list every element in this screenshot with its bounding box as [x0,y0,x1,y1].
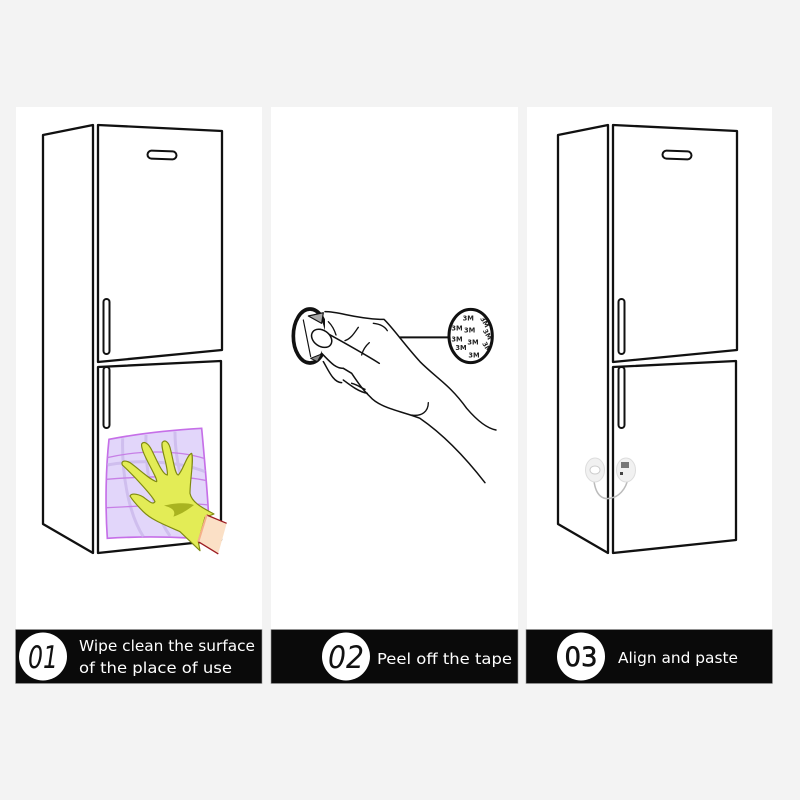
caption text: Align and paste [618,649,738,667]
step number 03 [557,632,605,680]
tape backing print: 3M [480,340,493,354]
caption bar: step 3 [526,630,772,684]
illustration: refrigerator, step 1 [43,125,222,553]
caption text [79,637,255,677]
tape backing print: 3M [481,328,494,342]
panel: step 2 peel tape [271,107,518,630]
panel: step 3 align and paste [527,107,772,630]
illustration: cloth and yellow glove [106,428,227,554]
caption text: of the place of use [79,659,232,677]
caption text: Wipe clean the surface [79,637,255,655]
wrist [198,515,227,553]
tape backing print: 3M [463,315,474,323]
tape backing print: 3M [478,315,491,329]
tape backing print: 3M [468,352,480,360]
step number 02: 02 [328,640,364,676]
glove [122,441,214,551]
step number 01 [19,632,67,680]
caption text: Peel off the tape [377,650,512,668]
caption bar: step 2 [271,630,518,684]
tape backing print: 3M [464,326,476,334]
caption bar: step 1 [16,630,262,684]
tape backing print: 3M [467,338,479,346]
illustration: fridge lock with cable [586,458,636,499]
step number 01: 01 [28,640,58,676]
illustration: hand peeling adhesive tape [293,309,496,483]
illustration: refrigerator, step 3 [558,125,737,553]
tape backing print: 3M [455,344,467,352]
step number 02 [322,632,370,680]
step number 03: 03 [564,642,598,673]
tape backing print: 3M [451,325,463,333]
tape backing print [452,316,491,358]
tape backing print: 3M [451,336,463,344]
panel: step 1 wipe clean [16,107,262,630]
